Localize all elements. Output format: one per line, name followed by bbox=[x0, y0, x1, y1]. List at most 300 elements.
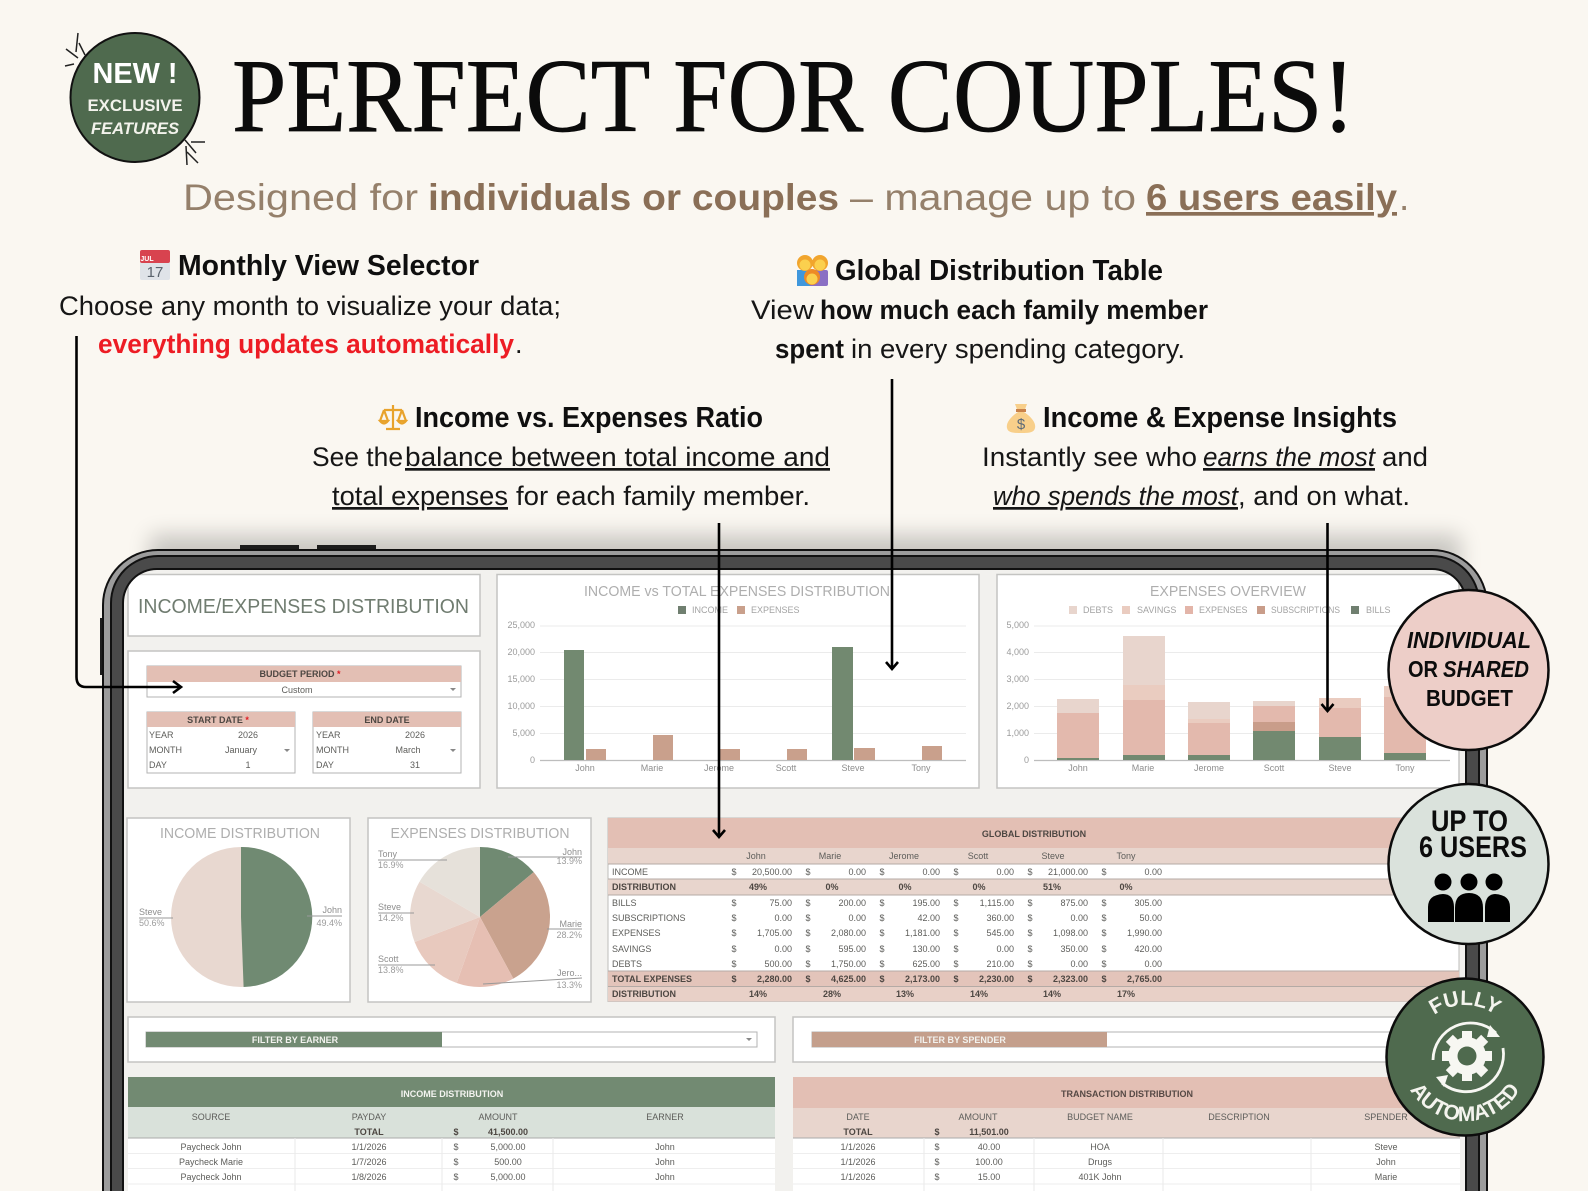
table: income distribution: 41,500.00 bbox=[488, 1127, 528, 1137]
bar chart: expenses overview: 1,000 bbox=[1006, 728, 1029, 738]
table: global distribution: 0.00 bbox=[996, 867, 1014, 877]
bar chart: income vs total expenses: Scott bbox=[776, 763, 797, 773]
table: global distribution: 0.00 bbox=[774, 913, 792, 923]
table: transaction distribution: $ bbox=[934, 1157, 940, 1167]
table: global distribution: 75.00 bbox=[769, 898, 792, 908]
table: global distribution: 1,181.00 bbox=[905, 928, 940, 938]
feature: global distribution table: View bbox=[751, 295, 815, 325]
badge: individual or shared budget: OR bbox=[1408, 656, 1438, 682]
table: income distribution: 5,000.00 bbox=[490, 1142, 526, 1152]
badge: up to 6 users: 6 USERS bbox=[1419, 831, 1527, 864]
pie chart: expenses distribution: Tony bbox=[378, 849, 398, 859]
bar chart: expenses overview: Scott bbox=[1264, 763, 1285, 773]
table: global distribution: $ bbox=[1027, 944, 1033, 954]
arrow: insights bbox=[1322, 523, 1334, 711]
table: global distribution: 0.00 bbox=[1144, 959, 1162, 969]
feature: income vs expenses ratio bbox=[312, 402, 830, 511]
feature: income vs expenses ratio: for each family member. bbox=[516, 481, 810, 511]
table: global distribution: $ bbox=[805, 898, 811, 908]
table: transaction distribution: SPENDER bbox=[1364, 1112, 1408, 1122]
feature: monthly view selector: . bbox=[515, 329, 523, 359]
table: income distribution: 500.00 bbox=[494, 1157, 522, 1167]
table: global distribution: 130.00 bbox=[912, 944, 940, 954]
table: global distribution: 0.00 bbox=[848, 867, 866, 877]
table: transaction distribution: HOA bbox=[1090, 1142, 1110, 1152]
table: global distribution: 13% bbox=[896, 989, 914, 999]
bar chart: income vs total expenses: Jerome bbox=[704, 763, 734, 773]
table: global distribution: BILLS bbox=[612, 898, 637, 908]
table: global distribution: $ bbox=[1101, 959, 1107, 969]
table: transaction distribution: 1/1/2026 bbox=[840, 1142, 876, 1152]
table: global distribution: 595.00 bbox=[838, 944, 866, 954]
feature: global distribution table: how much each family member bbox=[820, 295, 1208, 325]
bar chart: income vs total expenses: 5,000 bbox=[512, 728, 535, 738]
feature: global distribution table bbox=[751, 255, 1208, 364]
table: global distribution: 545.00 bbox=[986, 928, 1014, 938]
table: transaction distribution: 100.00 bbox=[975, 1157, 1003, 1167]
pie chart: expenses distribution: EXPENSES DISTRIBUTION bbox=[390, 825, 570, 842]
table: global distribution: $ bbox=[879, 944, 885, 954]
bar chart: expenses overview: EXPENSES bbox=[1199, 605, 1248, 615]
bar chart: expenses overview bbox=[997, 574, 1459, 788]
table: global distribution: 0% bbox=[898, 882, 912, 892]
table: global distribution: $ bbox=[1101, 928, 1107, 938]
badge: individual or shared budget: SHARED bbox=[1443, 656, 1529, 682]
table: global distribution: John bbox=[746, 851, 766, 861]
bar chart: income vs total expenses bbox=[497, 574, 979, 788]
table: global distribution: 28% bbox=[823, 989, 841, 999]
subtitle: . bbox=[1399, 177, 1409, 218]
table: global distribution: $ bbox=[805, 913, 811, 923]
feature: monthly view selector: Choose any month to visualize your data; bbox=[59, 291, 561, 321]
badge: new exclusive features bbox=[65, 33, 205, 165]
table: global distribution: 0.00 bbox=[996, 944, 1014, 954]
subtitle bbox=[183, 177, 1409, 218]
table: global distribution: 50.00 bbox=[1139, 913, 1162, 923]
bar chart: expenses overview: 0 bbox=[1024, 755, 1029, 765]
table: income distribution: $ bbox=[453, 1172, 459, 1182]
pie chart: expenses distribution: Jero... bbox=[557, 968, 582, 978]
table: transaction distribution: DESCRIPTION bbox=[1208, 1112, 1270, 1122]
table: global distribution: $ bbox=[731, 959, 737, 969]
pie chart: expenses distribution: 28.2% bbox=[556, 930, 582, 940]
table: global distribution: $ bbox=[731, 928, 737, 938]
panel: budget period: March bbox=[395, 745, 421, 755]
table: income distribution: $ bbox=[453, 1127, 459, 1137]
table: global distribution: $ bbox=[1101, 974, 1107, 984]
table: global distribution: $ bbox=[879, 928, 885, 938]
table: global distribution: 0% bbox=[1119, 882, 1133, 892]
bar chart: expenses overview: 3,000 bbox=[1006, 674, 1029, 684]
table: global distribution: $ bbox=[1027, 959, 1033, 969]
table: global distribution: 2,080.00 bbox=[831, 928, 866, 938]
table: global distribution: $ bbox=[805, 928, 811, 938]
subtitle: 6 users easily bbox=[1146, 177, 1397, 218]
panel: filter by earner: FILTER BY EARNER bbox=[252, 1035, 339, 1045]
panel: filter by earner bbox=[128, 1017, 775, 1062]
table: global distribution: 200.00 bbox=[838, 898, 866, 908]
panel: budget period: MONTH bbox=[149, 745, 182, 755]
icon: family bbox=[797, 255, 828, 286]
table: global distribution: 0.00 bbox=[922, 867, 940, 877]
bar chart: expenses overview: 2,000 bbox=[1006, 701, 1029, 711]
feature: income vs expenses ratio: balance between total income and bbox=[405, 442, 830, 472]
table: transaction distribution: AMOUNT bbox=[958, 1112, 998, 1122]
table: transaction distribution: $ bbox=[934, 1142, 940, 1152]
table: global distribution: 14% bbox=[1043, 989, 1061, 999]
bar chart: income vs total expenses: 15,000 bbox=[507, 674, 535, 684]
pie chart: income distribution: 49.4% bbox=[316, 918, 342, 928]
table: global distribution: $ bbox=[953, 959, 959, 969]
title: PERFECT FOR COUPLES! bbox=[232, 37, 1355, 154]
panel: budget period: 2026 bbox=[238, 730, 258, 740]
bar chart: expenses overview: Jerome bbox=[1194, 763, 1224, 773]
panel: budget period: January bbox=[225, 745, 258, 755]
table: global distribution: $ bbox=[805, 867, 811, 877]
panel: sheet title bbox=[128, 574, 480, 636]
table: transaction distribution: 1/1/2026 bbox=[840, 1157, 876, 1167]
table: income distribution: $ bbox=[453, 1142, 459, 1152]
table: transaction distribution: BUDGET NAME bbox=[1067, 1112, 1133, 1122]
table: global distribution: TOTAL EXPENSES bbox=[612, 974, 692, 984]
table: global distribution: $ bbox=[731, 913, 737, 923]
subtitle: Designed for bbox=[183, 177, 418, 218]
table: income distribution: INCOME DISTRIBUTION bbox=[401, 1089, 503, 1099]
table: global distribution: $ bbox=[731, 974, 737, 984]
table: income distribution: John bbox=[655, 1172, 675, 1182]
feature: global distribution table: spent bbox=[775, 334, 844, 364]
badge: fully automated: FULLY bbox=[1428, 990, 1502, 1014]
panel: sheet title: INCOME/EXPENSES DISTRIBUTION bbox=[138, 596, 469, 618]
pie chart: expenses distribution bbox=[368, 818, 591, 1002]
table: global distribution: 2,323.00 bbox=[1053, 974, 1088, 984]
feature: income and expense insights: , and on what. bbox=[1238, 481, 1410, 511]
table: transaction distribution: Marie bbox=[1375, 1172, 1397, 1182]
table: global distribution: 1,098.00 bbox=[1053, 928, 1088, 938]
bar chart: income vs total expenses: 0 bbox=[530, 755, 535, 765]
table: global distribution: 420.00 bbox=[1134, 944, 1162, 954]
badge: new exclusive features: FEATURES bbox=[91, 119, 180, 138]
table: global distribution: 0.00 bbox=[848, 913, 866, 923]
bar chart: expenses overview: Steve bbox=[1328, 763, 1352, 773]
bar chart: income vs total expenses: INCOME bbox=[692, 605, 728, 615]
arrow: monthly selector bbox=[76, 336, 181, 693]
table: global distribution: EXPENSES bbox=[612, 928, 661, 938]
table: transaction distribution: John bbox=[1376, 1157, 1396, 1167]
table: income distribution: 1/8/2026 bbox=[351, 1172, 387, 1182]
table: global distribution: 51% bbox=[1043, 882, 1061, 892]
feature: income vs expenses ratio: Income vs. Expenses Ratio bbox=[415, 402, 763, 434]
bar chart: income vs total expenses: Marie bbox=[641, 763, 663, 773]
table: global distribution: 2,173.00 bbox=[905, 974, 940, 984]
table: global distribution: $ bbox=[1027, 974, 1033, 984]
table: global distribution: 0% bbox=[972, 882, 986, 892]
panel: filter by spender bbox=[793, 1017, 1459, 1062]
bar chart: income vs total expenses: INCOME vs TOTAL EXPENSES DISTRIBUTION bbox=[584, 583, 890, 600]
table: global distribution: 305.00 bbox=[1134, 898, 1162, 908]
feature: income and expense insights: earns the most bbox=[1203, 442, 1376, 472]
pie chart: expenses distribution: Steve bbox=[378, 902, 401, 912]
table: income distribution: John bbox=[655, 1157, 675, 1167]
panel: budget period: DAY bbox=[149, 760, 167, 770]
table: transaction distribution: Steve bbox=[1374, 1142, 1398, 1152]
badge: fully automated: AUTOMATED bbox=[1410, 1084, 1518, 1122]
bar chart: expenses overview: BILLS bbox=[1366, 605, 1391, 615]
table: global distribution: 2,280.00 bbox=[757, 974, 792, 984]
panel: budget period: YEAR bbox=[149, 730, 174, 740]
icon: calendar bbox=[140, 250, 170, 281]
table: global distribution: 210.00 bbox=[986, 959, 1014, 969]
table: global distribution: 17% bbox=[1117, 989, 1135, 999]
table: income distribution: John bbox=[655, 1142, 675, 1152]
bar chart: expenses overview: SAVINGS bbox=[1137, 605, 1176, 615]
table: global distribution: 42.00 bbox=[917, 913, 940, 923]
bar chart: income vs total expenses: Steve bbox=[841, 763, 865, 773]
table: global distribution: 195.00 bbox=[912, 898, 940, 908]
icon: money bag: $ bbox=[1017, 416, 1026, 433]
icon: scales bbox=[380, 405, 406, 429]
table: global distribution: 500.00 bbox=[764, 959, 792, 969]
table: global distribution: $ bbox=[1027, 928, 1033, 938]
table: global distribution: $ bbox=[731, 944, 737, 954]
table: global distribution: 1,750.00 bbox=[831, 959, 866, 969]
table: transaction distribution: 401K John bbox=[1078, 1172, 1122, 1182]
table: global distribution: SAVINGS bbox=[612, 944, 651, 954]
badge: individual or shared budget: BUDGET bbox=[1426, 685, 1513, 711]
table: transaction distribution: $ bbox=[934, 1127, 940, 1137]
table: global distribution: Marie bbox=[819, 851, 841, 861]
bar chart: income vs total expenses: 10,000 bbox=[507, 701, 535, 711]
panel: budget period bbox=[128, 651, 480, 788]
badge: fully automated bbox=[1385, 977, 1545, 1137]
table: transaction distribution: 1/1/2026 bbox=[840, 1172, 876, 1182]
panel: budget period: 1 bbox=[245, 760, 251, 770]
table: income distribution: 1/7/2026 bbox=[351, 1157, 387, 1167]
pie chart: expenses distribution: 14.2% bbox=[378, 913, 404, 923]
pie chart: income distribution: INCOME DISTRIBUTION bbox=[160, 825, 320, 842]
table: global distribution: $ bbox=[731, 867, 737, 877]
table: global distribution: $ bbox=[805, 974, 811, 984]
table: global distribution: $ bbox=[953, 928, 959, 938]
table: global distribution: $ bbox=[879, 867, 885, 877]
table: global distribution: SUBSCRIPTIONS bbox=[612, 913, 686, 923]
subtitle: individuals or couples bbox=[428, 177, 839, 218]
feature: global distribution table: Global Distribution Table bbox=[835, 255, 1163, 287]
bar chart: income vs total expenses: 20,000 bbox=[507, 647, 535, 657]
table: global distribution: DISTRIBUTION bbox=[612, 989, 676, 999]
table: transaction distribution: 15.00 bbox=[978, 1172, 1000, 1182]
table: global distribution: Steve bbox=[1041, 851, 1065, 861]
table: global distribution: $ bbox=[805, 944, 811, 954]
table: global distribution: $ bbox=[1101, 867, 1107, 877]
table: transaction distribution: Drugs bbox=[1088, 1157, 1112, 1167]
pie chart: expenses distribution: 13.3% bbox=[556, 980, 582, 990]
table: global distribution: 20,500.00 bbox=[752, 867, 792, 877]
table: global distribution: $ bbox=[879, 898, 885, 908]
feature: income vs expenses ratio: See the bbox=[312, 442, 403, 472]
tablet screen bbox=[124, 570, 1465, 1191]
table: income distribution: PAYDAY bbox=[352, 1112, 386, 1122]
bar chart: income vs total expenses: Tony bbox=[911, 763, 931, 773]
table: global distribution: $ bbox=[1027, 913, 1033, 923]
table: global distribution: $ bbox=[1101, 913, 1107, 923]
feature: income and expense insights: and bbox=[1382, 442, 1428, 472]
table: global distribution: 0.00 bbox=[774, 944, 792, 954]
icon: gear with cycle arrows bbox=[1433, 1023, 1504, 1092]
tablet frame bbox=[100, 545, 1488, 1191]
table: global distribution: 14% bbox=[970, 989, 988, 999]
pie chart: expenses distribution: John bbox=[562, 847, 582, 857]
icon: money bag bbox=[1007, 404, 1035, 433]
icon: calendar: 17 bbox=[147, 264, 163, 281]
bar chart: income vs total expenses: EXPENSES bbox=[751, 605, 800, 615]
pie chart: expenses distribution: Scott bbox=[378, 954, 399, 964]
table: global distribution: 0.00 bbox=[1144, 867, 1162, 877]
table: income distribution: 1/1/2026 bbox=[351, 1142, 387, 1152]
table: global distribution: $ bbox=[1027, 898, 1033, 908]
table: global distribution: $ bbox=[1027, 867, 1033, 877]
icon: people bbox=[1428, 874, 1510, 922]
table: income distribution: EARNER bbox=[646, 1112, 684, 1122]
feature: monthly view selector bbox=[59, 250, 561, 359]
table: transaction distribution: DATE bbox=[846, 1112, 870, 1122]
table: global distribution: INCOME bbox=[612, 867, 648, 877]
table: global distribution: 4,625.00 bbox=[831, 974, 866, 984]
table: transaction distribution: $ bbox=[934, 1172, 940, 1182]
table: transaction distribution: TRANSACTION DISTRIBUTION bbox=[1061, 1089, 1193, 1099]
panel: budget period: 31 bbox=[410, 760, 420, 770]
bar chart: expenses overview: DEBTS bbox=[1083, 605, 1113, 615]
table: global distribution: DISTRIBUTION bbox=[612, 882, 676, 892]
subtitle: – manage up to bbox=[850, 177, 1136, 218]
badge: new exclusive features: NEW ! bbox=[92, 58, 178, 90]
feature: income and expense insights: who spends the most bbox=[993, 481, 1239, 511]
table: global distribution: $ bbox=[953, 974, 959, 984]
feature: income vs expenses ratio: total expenses bbox=[332, 481, 508, 511]
table: transaction distribution: 40.00 bbox=[978, 1142, 1000, 1152]
feature: global distribution table: in every spending category. bbox=[851, 334, 1185, 364]
icon: calendar: JUL bbox=[140, 256, 154, 263]
table: global distribution: 875.00 bbox=[1060, 898, 1088, 908]
feature: monthly view selector: Monthly View Selector bbox=[178, 250, 479, 282]
bar chart: expenses overview: EXPENSES OVERVIEW bbox=[1150, 583, 1307, 600]
table: global distribution: 1,705.00 bbox=[757, 928, 792, 938]
table: global distribution: DEBTS bbox=[612, 959, 642, 969]
table: income distribution: Paycheck John bbox=[180, 1172, 242, 1182]
table: global distribution: 1,990.00 bbox=[1127, 928, 1162, 938]
table: global distribution: $ bbox=[953, 898, 959, 908]
feature: income and expense insights: Income & Expense Insights bbox=[1043, 402, 1397, 434]
table: global distribution: $ bbox=[1101, 898, 1107, 908]
bar chart: expenses overview: Marie bbox=[1132, 763, 1154, 773]
feature: income and expense insights bbox=[982, 402, 1428, 511]
table: income distribution: 5,000.00 bbox=[490, 1172, 526, 1182]
table: transaction distribution: TOTAL bbox=[843, 1127, 873, 1137]
badge: up to 6 users: UP TO bbox=[1431, 805, 1508, 838]
panel: budget period: BUDGET PERIOD * bbox=[259, 669, 341, 679]
table: global distribution: $ bbox=[879, 959, 885, 969]
bar chart: expenses overview: Tony bbox=[1395, 763, 1415, 773]
pie chart: expenses distribution: Marie bbox=[559, 919, 582, 929]
table: global distribution: $ bbox=[953, 913, 959, 923]
table: global distribution: 1,115.00 bbox=[980, 898, 1014, 908]
panel: budget period: MONTH bbox=[316, 745, 349, 755]
bar chart: expenses overview: SUBSCRIPTIONS bbox=[1271, 605, 1340, 615]
table: global distribution: $ bbox=[953, 944, 959, 954]
panel: filter by spender: FILTER BY SPENDER bbox=[914, 1035, 1006, 1045]
table: transaction distribution: 11,501.00 bbox=[969, 1127, 1009, 1137]
table: global distribution: 0.00 bbox=[1070, 959, 1088, 969]
table: global distribution: 2,765.00 bbox=[1127, 974, 1162, 984]
table: global distribution: $ bbox=[805, 959, 811, 969]
table: income distribution: SOURCE bbox=[192, 1112, 230, 1122]
bar chart: expenses overview: John bbox=[1068, 763, 1088, 773]
badge: individual or shared budget: INDIVIDUAL bbox=[1407, 627, 1531, 653]
pie chart: expenses distribution: 13.8% bbox=[378, 965, 404, 975]
table: global distribution: 625.00 bbox=[912, 959, 940, 969]
table: income distribution: AMOUNT bbox=[478, 1112, 518, 1122]
table: global distribution: GLOBAL DISTRIBUTION bbox=[982, 829, 1086, 839]
panel: budget period: Custom bbox=[281, 685, 313, 695]
table: income distribution: TOTAL bbox=[354, 1127, 384, 1137]
table: global distribution: Jerome bbox=[889, 851, 919, 861]
feature: income and expense insights: Instantly see who bbox=[982, 442, 1197, 472]
table: global distribution: 360.00 bbox=[986, 913, 1014, 923]
bar chart: expenses overview: 5,000 bbox=[1006, 620, 1029, 630]
table: global distribution: $ bbox=[879, 913, 885, 923]
panel: budget period: YEAR bbox=[316, 730, 341, 740]
table: income distribution bbox=[128, 1077, 775, 1191]
pie chart: expenses distribution: 13.9% bbox=[556, 856, 582, 866]
table: global distribution: 14% bbox=[749, 989, 767, 999]
badge: new exclusive features: EXCLUSIVE bbox=[88, 96, 182, 115]
arrow: global distribution table bbox=[886, 379, 898, 669]
bar chart: income vs total expenses: John bbox=[575, 763, 595, 773]
panel: budget period: END DATE bbox=[364, 715, 410, 725]
bar chart: expenses overview: 4,000 bbox=[1006, 647, 1029, 657]
panel: budget period: 2026 bbox=[405, 730, 425, 740]
badge: individual or shared budget bbox=[1388, 590, 1548, 750]
table: global distribution bbox=[608, 818, 1459, 1002]
table: global distribution: $ bbox=[879, 974, 885, 984]
table: income distribution: $ bbox=[453, 1157, 459, 1167]
table: transaction distribution bbox=[793, 1077, 1460, 1191]
table: global distribution: $ bbox=[953, 867, 959, 877]
pie chart: income distribution: 50.6% bbox=[139, 918, 165, 928]
table: global distribution: Tony bbox=[1116, 851, 1136, 861]
pie chart: income distribution: John bbox=[322, 905, 342, 915]
table: global distribution: Scott bbox=[968, 851, 989, 861]
bar chart: income vs total expenses: 25,000 bbox=[507, 620, 535, 630]
table: global distribution: 2,230.00 bbox=[979, 974, 1014, 984]
table: global distribution: 0% bbox=[825, 882, 839, 892]
table: global distribution: $ bbox=[731, 898, 737, 908]
table: global distribution: $ bbox=[1101, 944, 1107, 954]
panel: budget period: START DATE * bbox=[187, 715, 249, 725]
table: global distribution: 350.00 bbox=[1060, 944, 1088, 954]
arrow: income vs expenses bbox=[713, 523, 725, 837]
pie chart: income distribution: Steve bbox=[139, 907, 162, 917]
feature: monthly view selector: everything updates automatically bbox=[98, 329, 514, 359]
pie chart: income distribution bbox=[127, 818, 350, 1002]
badge: up to 6 users bbox=[1388, 784, 1548, 944]
table: global distribution: 0.00 bbox=[1070, 913, 1088, 923]
pie chart: expenses distribution: 16.9% bbox=[378, 860, 404, 870]
panel: budget period: DAY bbox=[316, 760, 334, 770]
table: income distribution: Paycheck John bbox=[180, 1142, 242, 1152]
table: global distribution: 49% bbox=[749, 882, 767, 892]
table: global distribution: 21,000.00 bbox=[1048, 867, 1088, 877]
